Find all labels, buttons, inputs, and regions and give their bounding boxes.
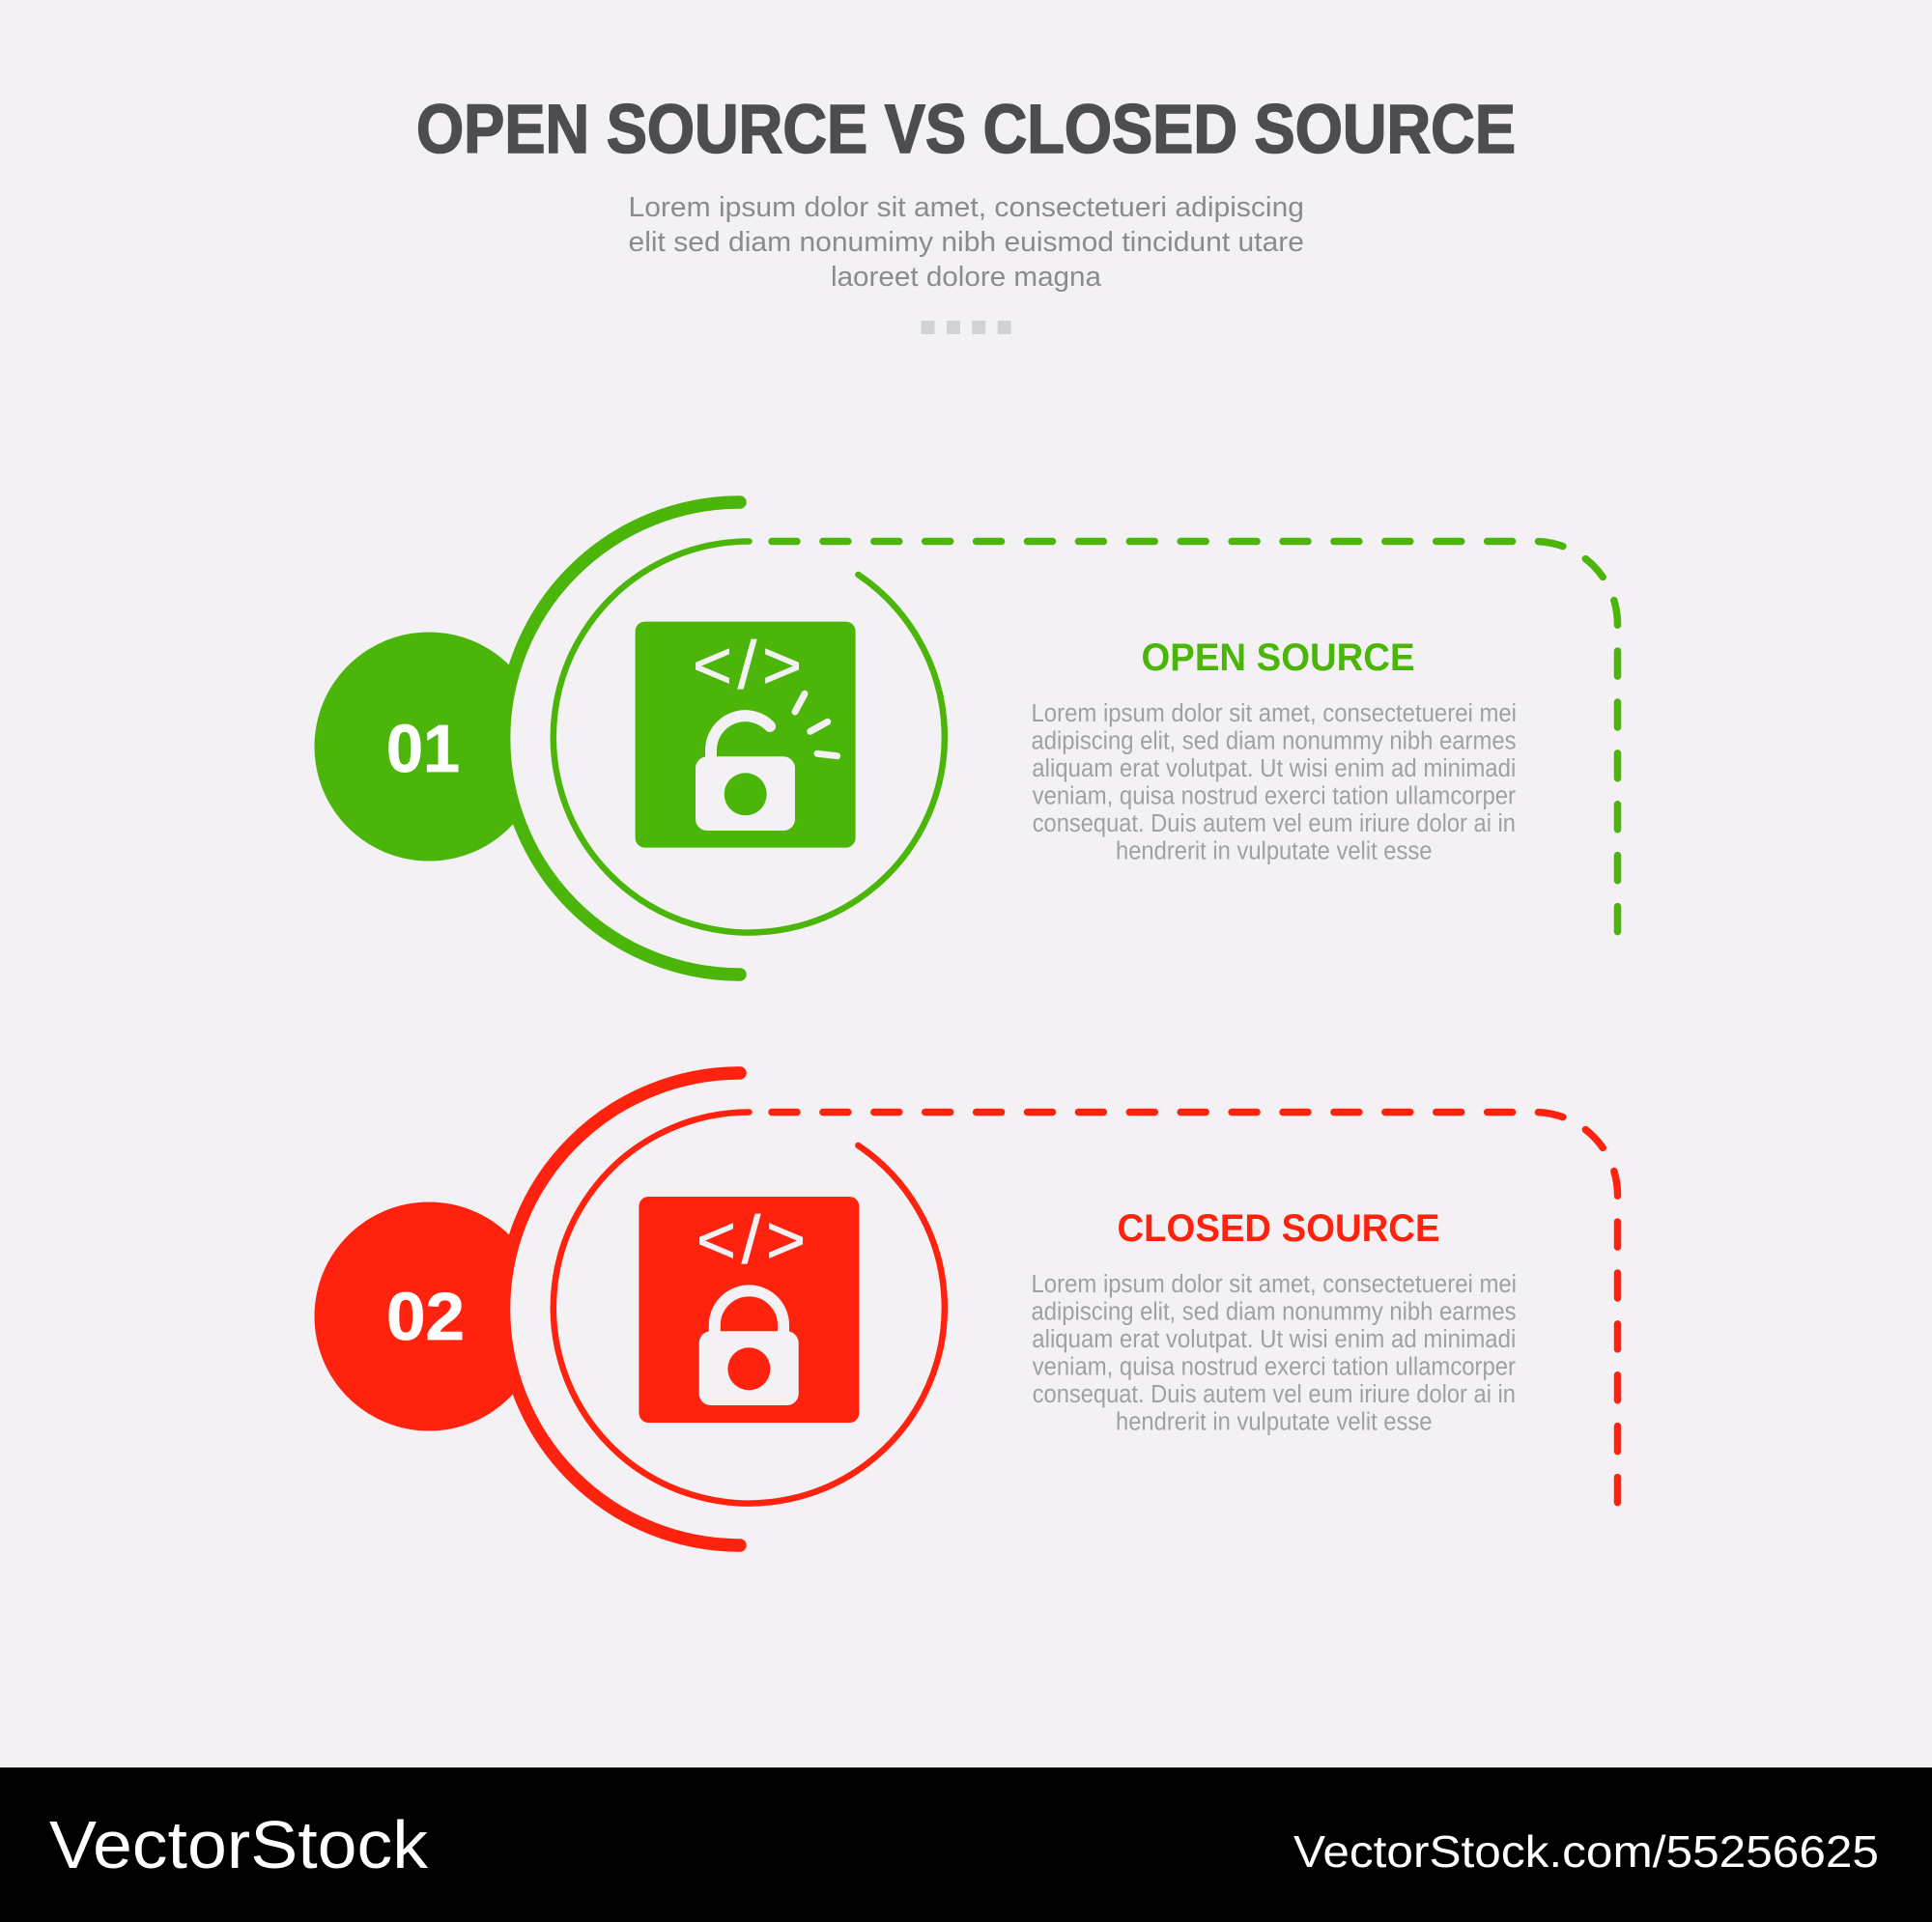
heading: open source: OPEN SOURCE xyxy=(1142,636,1414,679)
body text: open source: consequat. Duis autem vel eum iriure dolor ai in xyxy=(1033,810,1516,837)
number badge 02: 02 xyxy=(386,1279,465,1354)
body text: closed source: Lorem ipsum dolor sit amet, consectetuerei mei xyxy=(1032,1271,1517,1298)
inner ring xyxy=(554,541,945,932)
panel: open source xyxy=(315,502,1617,975)
body text: closed source: veniam, quisa nostrud exerci tation ullamcorper xyxy=(1033,1354,1516,1381)
outer arc xyxy=(504,1073,740,1545)
icon: unlocked code file xyxy=(636,622,856,848)
icon: locked code file xyxy=(639,1197,859,1423)
outer arc xyxy=(504,502,740,975)
dashed connector xyxy=(772,541,1617,932)
body text: open source: veniam, quisa nostrud exerci tation ullamcorper xyxy=(1033,782,1516,809)
icon: unlocked code file: </> xyxy=(693,628,802,703)
title: OPEN SOURCE VS CLOSED SOURCE xyxy=(416,92,1516,168)
number badge 02 xyxy=(315,1080,970,1540)
dashed connector xyxy=(772,1113,1617,1504)
panel: closed source xyxy=(315,1073,1617,1545)
body text: open source: adipiscing elit, sed diam nonummy nibh earmes xyxy=(1032,728,1517,755)
body text: open source: hendrerit in vulputate velit esse xyxy=(1116,838,1432,865)
body text: closed source: aliquam erat volutpat. Ut wisi enim ad minimadi xyxy=(1032,1326,1516,1353)
icon: locked code file: </> xyxy=(696,1201,806,1277)
subtitle text block: Lorem ipsum dolor sit amet, consectetueri adipiscing xyxy=(628,192,1304,223)
footer image id: VectorStock.com/55256625 xyxy=(1293,1826,1879,1877)
body text: closed source xyxy=(1032,1271,1517,1435)
subtitle text block: elit sed diam nonumimy nibh euismod tincidunt utare xyxy=(628,227,1304,258)
inner ring xyxy=(554,1112,945,1503)
number badge 01 xyxy=(315,509,970,969)
heading: closed source: CLOSED SOURCE xyxy=(1117,1207,1439,1250)
footer bar xyxy=(0,1767,1932,1922)
body text: closed source: consequat. Duis autem vel eum iriure dolor ai in xyxy=(1033,1381,1516,1408)
body text: open source xyxy=(1032,700,1517,865)
number badge 01: 01 xyxy=(386,711,460,786)
body text: open source: Lorem ipsum dolor sit amet, consectetuerei mei xyxy=(1032,700,1517,727)
heading divider squares xyxy=(922,321,1011,334)
body text: open source: aliquam erat volutpat. Ut wisi enim ad minimadi xyxy=(1032,755,1516,782)
subtitle text block xyxy=(628,192,1304,293)
footer logo text: VectorStock xyxy=(49,1807,429,1882)
subtitle text block: laoreet dolore magna xyxy=(831,262,1102,293)
body text: closed source: adipiscing elit, sed diam nonummy nibh earmes xyxy=(1032,1298,1517,1325)
body text: closed source: hendrerit in vulputate velit esse xyxy=(1116,1408,1432,1435)
